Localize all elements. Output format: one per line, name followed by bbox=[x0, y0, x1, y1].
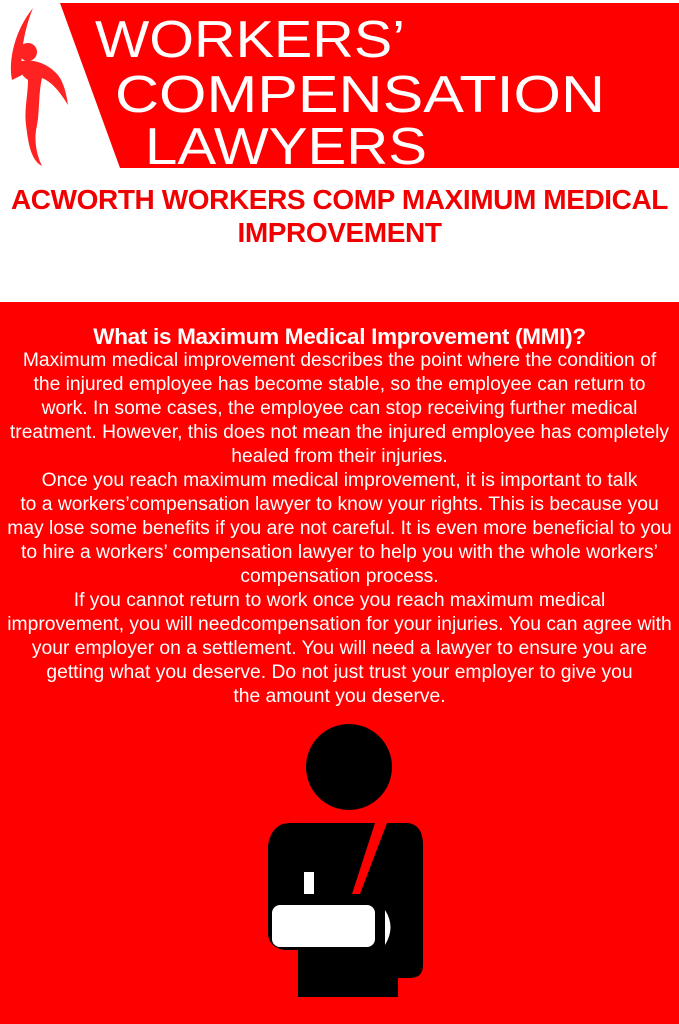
title: ACWORTH WORKERS COMP MAXIMUM MEDICAL bbox=[11, 184, 668, 215]
logo bbox=[10, 3, 679, 170]
text block: getting what you deserve. Do not just trust your employer to give you bbox=[46, 662, 633, 683]
title bbox=[11, 184, 668, 248]
logo: WORKERS’ bbox=[95, 11, 405, 69]
icon: person with arm sling bbox=[268, 724, 423, 997]
text block: may lose some benefits if you are not careful. It is even more beneficial to you bbox=[7, 518, 672, 539]
heading: What is Maximum Medical Improvement (MMI)? bbox=[93, 324, 586, 349]
text block: healed from their injuries. bbox=[231, 446, 448, 467]
logo figure bbox=[11, 8, 68, 166]
text block: work. In some cases, the employee can stop receiving further medical bbox=[42, 398, 637, 419]
text block: your employer on a settlement. You will need a lawyer to ensure you are bbox=[32, 638, 647, 659]
text block: Once you reach maximum medical improvement, it is important to talk bbox=[42, 470, 637, 491]
panel: MMI bbox=[0, 302, 679, 1024]
text block: improvement, you will needcompensation for your injuries. You can agree with bbox=[7, 614, 672, 635]
text block: the injured employee has become stable, so the employee can return to bbox=[33, 374, 646, 395]
text block: to hire a workers’ compensation lawyer to help you with the whole workers’ bbox=[21, 542, 658, 563]
logo: COMPENSATION bbox=[115, 66, 605, 124]
title: IMPROVEMENT bbox=[237, 217, 442, 248]
text block: If you cannot return to work once you reach maximum medical bbox=[74, 590, 605, 611]
text block: the amount you deserve. bbox=[233, 686, 446, 707]
text block bbox=[7, 324, 672, 707]
text block: Maximum medical improvement describes the point where the condition of bbox=[23, 350, 656, 371]
text block: compensation process. bbox=[240, 566, 439, 587]
text block: treatment. However, this does not mean the injured employee has completely bbox=[10, 422, 669, 443]
text block: to a workers’compensation lawyer to know your rights. This is because you bbox=[20, 494, 659, 515]
